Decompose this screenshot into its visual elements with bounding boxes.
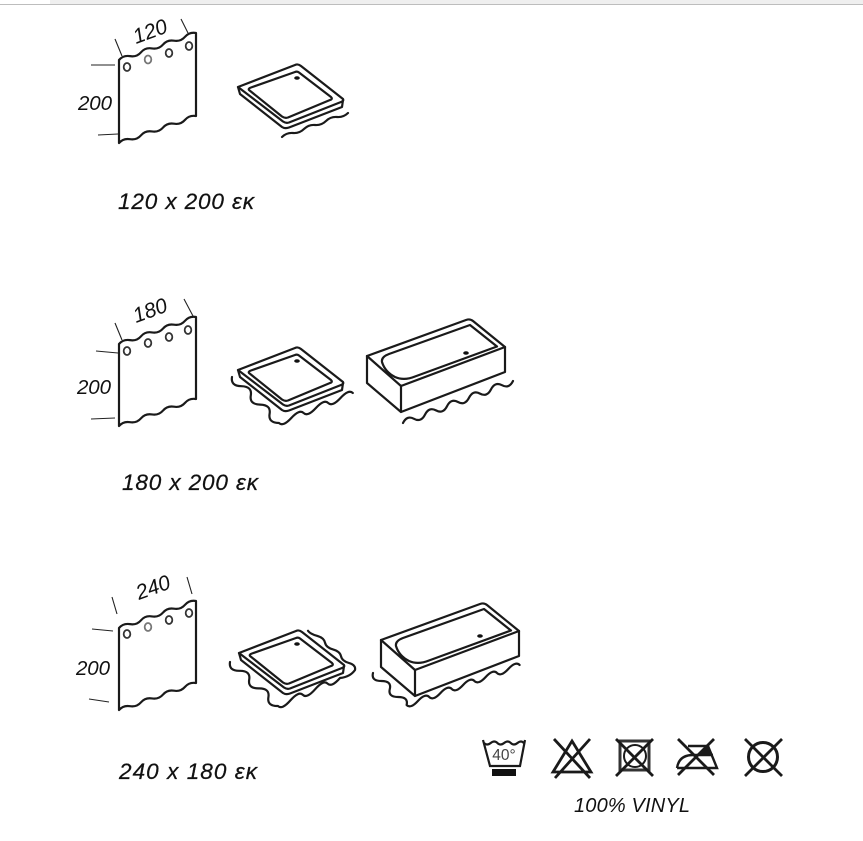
height dimension 200: 200 bbox=[75, 657, 111, 680]
icon: do not bleach bbox=[553, 739, 591, 778]
wave: floor line bbox=[403, 381, 513, 423]
wave: floor line bbox=[282, 113, 348, 137]
icon: do not tumble dry bbox=[616, 739, 653, 776]
panel: 120 x 200 size bbox=[77, 15, 348, 214]
icon: do not dry clean bbox=[745, 739, 782, 776]
icon: bathtub bbox=[373, 603, 520, 706]
wave: floor line bbox=[373, 664, 520, 706]
wave: floor line bbox=[232, 377, 353, 424]
height dimension 200: 200 bbox=[77, 92, 113, 115]
height dimension 200: 200 bbox=[76, 376, 112, 399]
panel: care symbols bbox=[483, 739, 782, 817]
icon: do not iron bbox=[677, 739, 717, 775]
size label: 180 x 200 εκ bbox=[122, 470, 260, 495]
icon: curtain 120 x 200 bbox=[91, 19, 196, 143]
icon: shower tray bbox=[230, 630, 355, 707]
icon: curtain 180 x 200 bbox=[91, 299, 196, 426]
icon: bathtub bbox=[367, 319, 513, 423]
width dimension 120: 120 bbox=[130, 15, 171, 49]
panel: 240 x 180 size bbox=[75, 571, 520, 784]
icon: curtain 240 x 200 bbox=[89, 577, 196, 710]
size label: 120 x 200 εκ bbox=[118, 189, 256, 214]
width dimension 240: 240 bbox=[132, 571, 174, 605]
panel: 180 x 200 size bbox=[76, 294, 513, 495]
material label: 100% VINYL bbox=[574, 795, 690, 817]
icon: wash at 40 degrees bbox=[483, 740, 525, 776]
icon: shower tray bbox=[232, 347, 353, 424]
wave: floor line bbox=[230, 631, 355, 707]
width dimension 180: 180 bbox=[130, 294, 171, 328]
icon: wash at 40 degrees: 40° bbox=[492, 747, 516, 764]
icon: shower tray bbox=[238, 64, 348, 137]
size label: 240 x 180 εκ bbox=[118, 759, 259, 784]
